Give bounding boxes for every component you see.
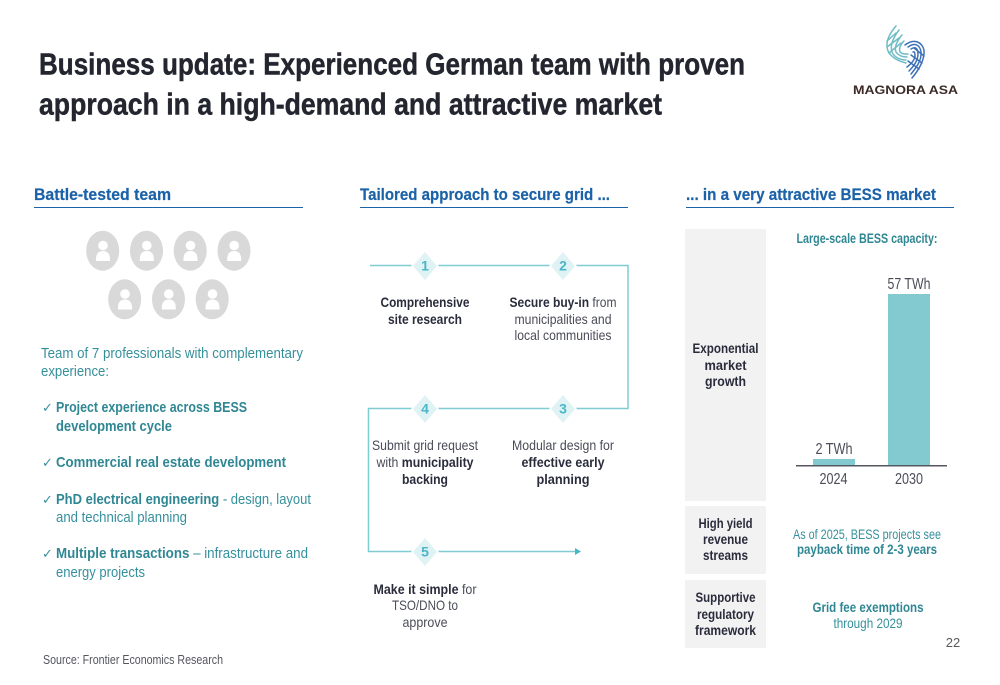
step 1 marker: 1 (421, 258, 429, 274)
bullet: project experience (42, 399, 247, 435)
panel: supportive regulatory framework: regulatory (697, 606, 754, 622)
bullet: project experience: Project experience across BESS (56, 399, 247, 416)
logo: Magnora ASA (853, 26, 958, 97)
bullet: commercial real estate: Commercial real estate development (56, 454, 286, 471)
text: team intro: experience: (41, 363, 109, 380)
bullet: project experience: development cycle (56, 418, 172, 435)
heading: tailored approach: Tailored approach to secure grid ... (360, 185, 610, 204)
panel: high yield revenue streams: High yield (698, 515, 752, 531)
bullet: multiple transactions: energy projects (56, 564, 145, 581)
step 3 marker (551, 395, 575, 423)
panel: supportive regulatory framework (685, 580, 766, 648)
step 4 text (372, 437, 478, 487)
bar chart: BESS capacity: 2 TWh (816, 441, 852, 458)
step 3 text: planning (536, 471, 590, 487)
heading: battle-tested team: Battle-tested team (34, 185, 171, 204)
bullet: PhD electrical engineering: ✓ (42, 493, 53, 508)
panel: exponential market growth: market (704, 357, 747, 373)
bar chart: BESS capacity: 2030 (895, 471, 923, 488)
text: team intro (41, 345, 303, 380)
step 2 text: Secure buy-in from (510, 294, 616, 310)
step 1 text (380, 294, 470, 327)
step 1 text: site research (388, 311, 462, 327)
arrow: process flow line (368, 266, 628, 555)
icons: team of seven avatars (86, 231, 250, 319)
bar chart: BESS capacity: 57 TWh (888, 276, 930, 293)
panel: high yield revenue streams (685, 506, 766, 574)
bullet: commercial real estate: ✓ (42, 456, 53, 471)
text: grid fee exemptions: Grid fee exemptions (812, 599, 924, 615)
bullet: PhD electrical engineering (42, 491, 312, 526)
text: grid fee exemptions: through 2029 (834, 615, 903, 631)
step 2 text: municipalities and (514, 311, 612, 327)
text: grid fee exemptions (812, 599, 924, 631)
panel: exponential market growth (685, 229, 766, 501)
step 5 text: Make it simple for (374, 581, 477, 597)
step 5 text: TSO/DNO to (392, 597, 458, 613)
step 4 text: backing (402, 471, 448, 487)
step 1 text: Comprehensive (380, 294, 470, 310)
bullet: project experience: ✓ (42, 401, 53, 416)
title: Business update: Experienced German team with proven (39, 46, 745, 82)
title: approach in a high-demand and attractive market (39, 86, 662, 122)
panel: supportive regulatory framework: Supportive (696, 589, 756, 605)
text: team intro: Team of 7 professionals with complementary (41, 345, 303, 362)
panel: high yield revenue streams: revenue (703, 531, 748, 547)
logo: Magnora ASA: MAGNORA ASA (853, 85, 958, 97)
step 2 marker (551, 252, 575, 280)
panel: supportive regulatory framework: framework (695, 622, 756, 638)
step 3 text: Modular design for (512, 437, 614, 453)
source note: Source: Frontier Economics Research (43, 652, 223, 667)
text: payback time: As of 2025, BESS projects see (793, 526, 941, 542)
page number: 22 (946, 635, 960, 650)
text: payback time: payback time of 2-3 years (797, 541, 937, 557)
step 5 marker (413, 538, 437, 566)
step 3 marker: 3 (559, 400, 567, 416)
bullet: multiple transactions: Multiple transactions – infrastructure and (56, 545, 308, 562)
bullet: multiple transactions: ✓ (42, 547, 53, 562)
panel: high yield revenue streams: streams (703, 547, 748, 563)
step 2 text (510, 294, 616, 343)
bullet: PhD electrical engineering: and technical planning (56, 509, 187, 526)
bar chart: BESS capacity: 2024 (820, 471, 848, 488)
step 2 marker: 2 (559, 258, 567, 274)
step 4 marker: 4 (421, 400, 429, 416)
chart heading: BESS capacity: Large-scale BESS capacity: (796, 230, 938, 246)
step 2 text: local communities (514, 327, 612, 343)
step 1 marker (413, 252, 437, 280)
title (39, 46, 745, 122)
step 3 text (512, 437, 614, 487)
step 5 marker: 5 (421, 544, 429, 560)
step 3 text: effective early (522, 454, 605, 470)
step 4 marker (413, 395, 437, 423)
step 5 text: approve (402, 614, 448, 630)
bullet: PhD electrical engineering: PhD electrical engineering - design, layout (56, 491, 312, 508)
step 4 text: Submit grid request (372, 437, 478, 453)
step 4 text: with municipality (376, 454, 474, 470)
panel: exponential market growth: growth (705, 373, 746, 389)
step 5 text (374, 581, 477, 630)
bar chart: BESS capacity (796, 276, 947, 488)
bullet: multiple transactions (42, 545, 308, 581)
panel: exponential market growth: Exponential (692, 340, 758, 356)
heading: attractive market: ... in a very attractive BESS market (686, 185, 936, 204)
text: payback time (793, 526, 941, 557)
